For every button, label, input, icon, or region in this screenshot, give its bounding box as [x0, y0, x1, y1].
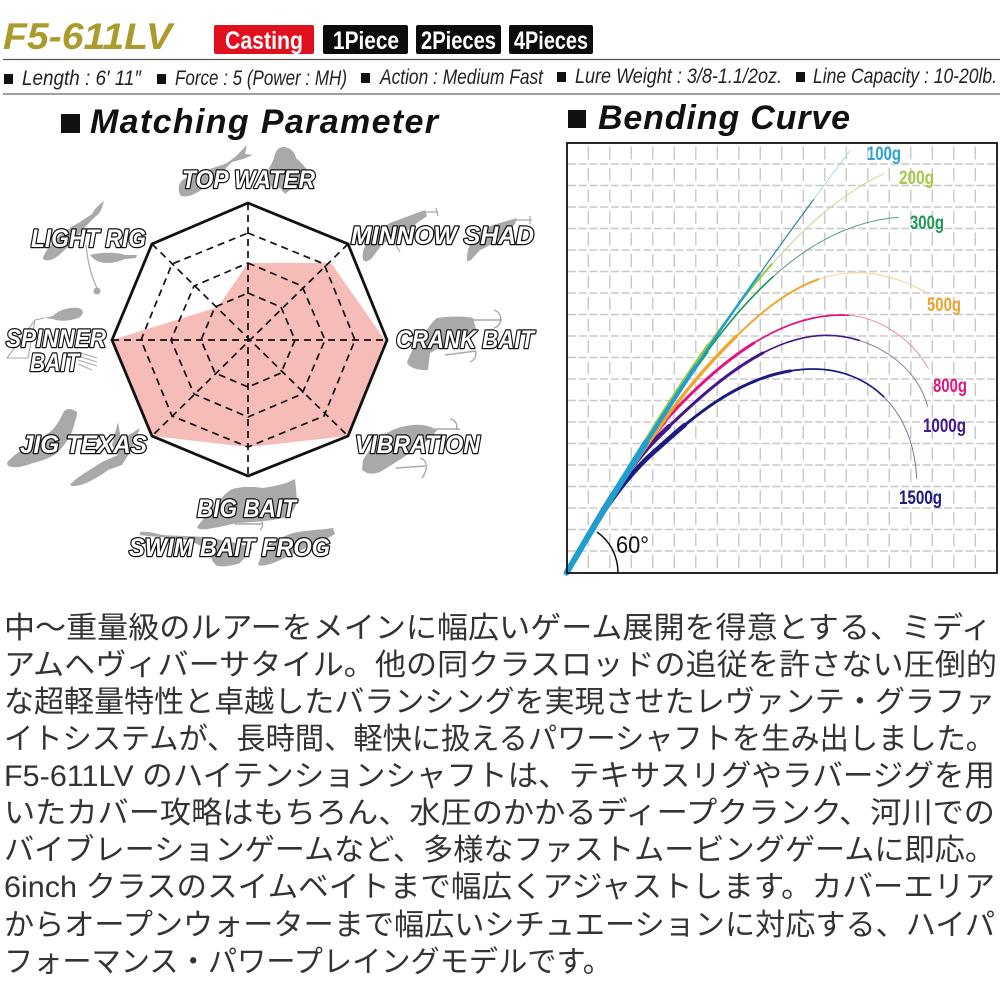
icon: frog	[258, 528, 335, 566]
badges: rod type and pieces: 1Piece	[333, 27, 399, 55]
description paragraph: フォーマンス・パワープレイングモデルです。	[4, 946, 612, 979]
curve weight labels: 100g	[867, 144, 901, 165]
icon: shad lure	[467, 216, 532, 261]
radar grid	[112, 203, 385, 476]
icon: texas rig	[70, 422, 140, 486]
description paragraph: F5-611LV のハイテンションシャフトは、テキサスリグやラバージグを用	[4, 760, 995, 793]
curve: 200g	[567, 174, 883, 573]
radar chart	[112, 203, 387, 476]
description paragraph	[4, 612, 997, 979]
radar axis labels: BIG BAIT	[197, 495, 298, 523]
description paragraph: イトシステムが、長時間、軽快に扱えるパワーシャフトを生み出しました。	[4, 723, 995, 756]
icon: jig	[7, 409, 77, 467]
curve: 300g	[567, 217, 898, 573]
description paragraph: 中～重量級のルアーをメインに幅広いゲーム展開を得意とする、ミディ	[4, 612, 992, 645]
radar axis labels: CRANK BAIT	[396, 326, 536, 354]
curve weight labels: 500g	[927, 295, 961, 316]
curve weight labels: 1000g	[923, 416, 966, 437]
lure silhouettes	[7, 145, 532, 566]
radar axis labels: JIG TEXAS	[20, 431, 147, 459]
curves	[567, 151, 928, 573]
icon: minnow lure	[363, 208, 438, 261]
radar axis labels: LIGHT RIG	[31, 225, 146, 253]
icon: spinner bait	[7, 308, 97, 370]
curve weight labels: 200g	[899, 168, 934, 189]
bending curve chart	[567, 143, 997, 573]
spec row	[4, 65, 997, 90]
description paragraph: 6inch クラスのスイムベイトまで幅広くアジャストします。カバーエリア	[4, 871, 995, 904]
curve weight labels: 300g	[910, 213, 944, 234]
curve: 1000g	[567, 335, 928, 573]
curve: 800g	[567, 315, 928, 573]
radar outline	[112, 203, 387, 476]
radar axis labels: BAIT	[30, 349, 81, 377]
badges: rod type and pieces	[214, 25, 593, 55]
icon: top water lures	[179, 145, 314, 196]
spec row: Force : 5 (Power : MH)	[175, 67, 347, 90]
curve: 100g	[567, 151, 850, 573]
curve weight labels: 1500g	[899, 488, 942, 509]
badges: rod type and pieces: 2Pieces	[421, 27, 496, 55]
icon: crank bait	[407, 310, 502, 370]
description paragraph: な超軽量特性と卓越したバランシングを実現させたレヴァンテ・グラファ	[4, 686, 995, 719]
radar axis labels: VIBRATION	[355, 431, 481, 459]
description paragraph: バイブレーションゲームなど、多様なファストムービングゲームに即応。	[4, 834, 995, 867]
curve: 500g	[567, 273, 925, 573]
badges: rod type and pieces: Casting	[225, 27, 303, 55]
angle arc	[597, 532, 618, 573]
title: model name: F5-611LV	[3, 16, 176, 57]
chart grid	[568, 146, 997, 573]
spec row: Length : 6′ 11″	[22, 67, 142, 90]
icon: big bait	[197, 479, 297, 530]
heading: Bending Curve: Bending Curve	[598, 99, 850, 137]
heading: Matching Parameter: Matching Parameter	[90, 103, 440, 141]
description paragraph: アムヘヴィバーサタイル。他の同クラスロッドの追従を許さない圧倒的	[4, 649, 997, 682]
curve: 1500g	[567, 369, 917, 573]
badges: rod type and pieces: 4Pieces	[514, 27, 588, 55]
spec row: Action : Medium Fast	[378, 66, 544, 89]
radar axis labels: MINNOW SHAD	[351, 222, 534, 250]
radar value polygon	[112, 263, 385, 447]
description paragraph: いたカバー攻略はもちろん、水圧のかかるディープクランク、河川での	[4, 797, 995, 830]
curve weight labels	[867, 144, 967, 509]
chart frame	[567, 143, 997, 573]
radar axis labels: SPINNER	[6, 325, 106, 353]
curve weight labels: 800g	[933, 376, 967, 397]
icon: swim bait	[140, 532, 253, 566]
radar axis labels: SWIM BAIT FROG	[129, 534, 330, 562]
icon: vibration lure	[362, 419, 460, 478]
icon: light rig lures	[43, 201, 137, 294]
angle label: 60°	[616, 532, 649, 559]
radar axis labels	[6, 166, 536, 562]
spec row: Lure Weight : 3/8-1.1/2oz.	[575, 65, 782, 88]
description paragraph: からオープンウォーターまで幅広いシチュエーションに対応する、ハイパ	[4, 909, 995, 942]
radar axis labels: TOP WATER	[182, 166, 315, 194]
